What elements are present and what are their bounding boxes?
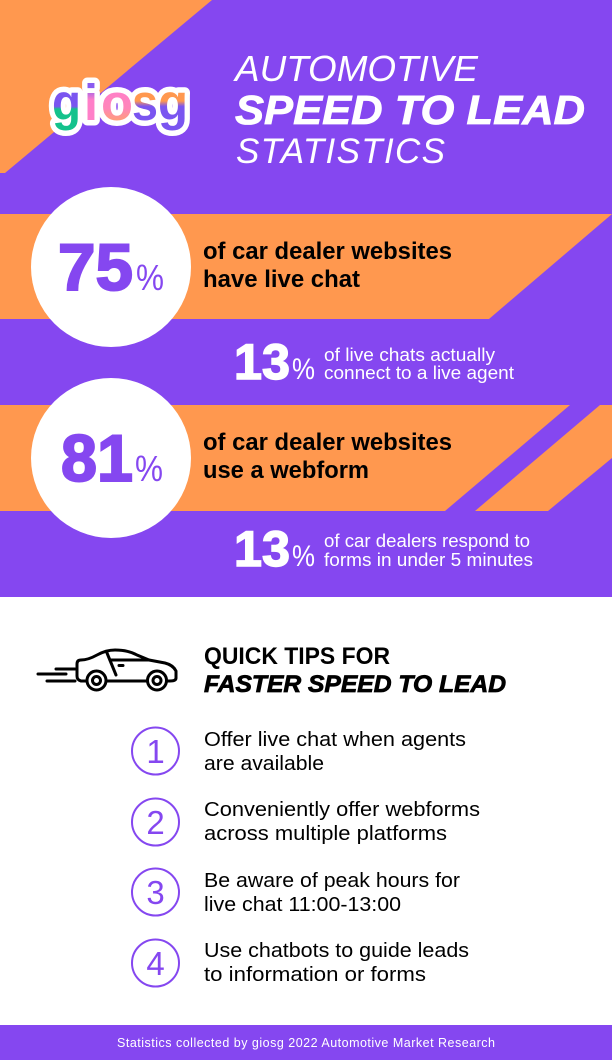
title: SPEED TO LEAD <box>235 87 585 133</box>
logo: giosg: i <box>84 74 98 131</box>
stat: 13 percent respond to forms <box>234 521 533 577</box>
title: STATISTICS <box>236 132 445 171</box>
logo: giosg: o <box>101 74 133 131</box>
tip 3: 3 <box>146 874 165 911</box>
tip 1: 1 <box>146 733 165 770</box>
circle: 75 percent <box>31 187 191 347</box>
circle: 81 percent <box>31 378 191 538</box>
logo: giosg: g <box>158 74 188 131</box>
logo: giosg: o <box>101 74 133 131</box>
webform stat text: of car dealer websites <box>203 429 452 456</box>
stat: 13 percent respond to forms: 13 <box>234 521 290 577</box>
logo: giosg: s <box>132 74 158 131</box>
tip 3: live chat 11:00-13:00 <box>204 894 401 916</box>
logo: giosg: s <box>132 74 158 131</box>
logo: giosg <box>52 74 188 131</box>
live chat stat text: of car dealer websites <box>203 238 452 265</box>
circle: 75 percent: 75 <box>58 230 133 304</box>
quick tips heading: QUICK TIPS FOR <box>204 643 390 670</box>
logo: giosg: g <box>52 74 81 131</box>
title <box>233 48 585 171</box>
stat: 13 percent live agent: % <box>292 353 315 386</box>
title: AUTOMOTIVE <box>233 48 479 89</box>
stat: 13 percent live agent: connect to a live agent <box>324 363 514 383</box>
panel: webform stat band <box>0 405 612 511</box>
stat: 13 percent live agent: 13 <box>234 334 290 390</box>
tip 1: are available <box>204 753 324 775</box>
webform stat text: use a webform <box>203 457 369 484</box>
logo: giosg: g <box>52 74 81 131</box>
tip 4: to information or forms <box>204 964 426 986</box>
tip 4 <box>132 940 469 986</box>
live chat stat text <box>203 238 452 293</box>
logo: giosg: i <box>84 74 98 131</box>
panel: live chat stat band <box>0 214 612 319</box>
panel: quick tips <box>0 597 612 1025</box>
icon: speeding car <box>38 650 176 690</box>
stat: 13 percent live agent <box>234 334 514 390</box>
tip 2: 2 <box>146 804 165 841</box>
tip 2 <box>132 798 480 846</box>
circle: 81 percent: % <box>135 448 163 489</box>
live chat stat text: have live chat <box>203 266 360 293</box>
tip 2: across multiple platforms <box>204 823 447 845</box>
tip 4: 4 <box>146 945 165 982</box>
footer source note: Statistics collected by giosg 2022 Automotive Market Research <box>117 1036 495 1050</box>
header orange shape <box>0 0 212 173</box>
circle: 81 percent: 81 <box>61 421 133 495</box>
webform stat text <box>203 429 452 484</box>
stat: 13 percent respond to forms: % <box>292 540 315 573</box>
stat: 13 percent live agent: of live chats actually <box>324 345 495 365</box>
tip 3: Be aware of peak hours for <box>204 870 460 892</box>
quick tips heading <box>204 643 506 698</box>
stat: 13 percent respond to forms: of car dealers respond to <box>324 531 530 551</box>
tip 4: Use chatbots to guide leads <box>204 940 469 962</box>
tip 2: Conveniently offer webforms <box>204 799 480 821</box>
tip 3 <box>132 868 460 916</box>
tip 1: Offer live chat when agents <box>204 729 466 751</box>
quick tips heading: FASTER SPEED TO LEAD <box>204 671 506 698</box>
stat: 13 percent respond to forms: forms in under 5 minutes <box>324 550 533 570</box>
tip 1 <box>132 728 466 775</box>
logo: giosg: g <box>158 74 188 131</box>
circle: 75 percent: % <box>136 257 164 298</box>
